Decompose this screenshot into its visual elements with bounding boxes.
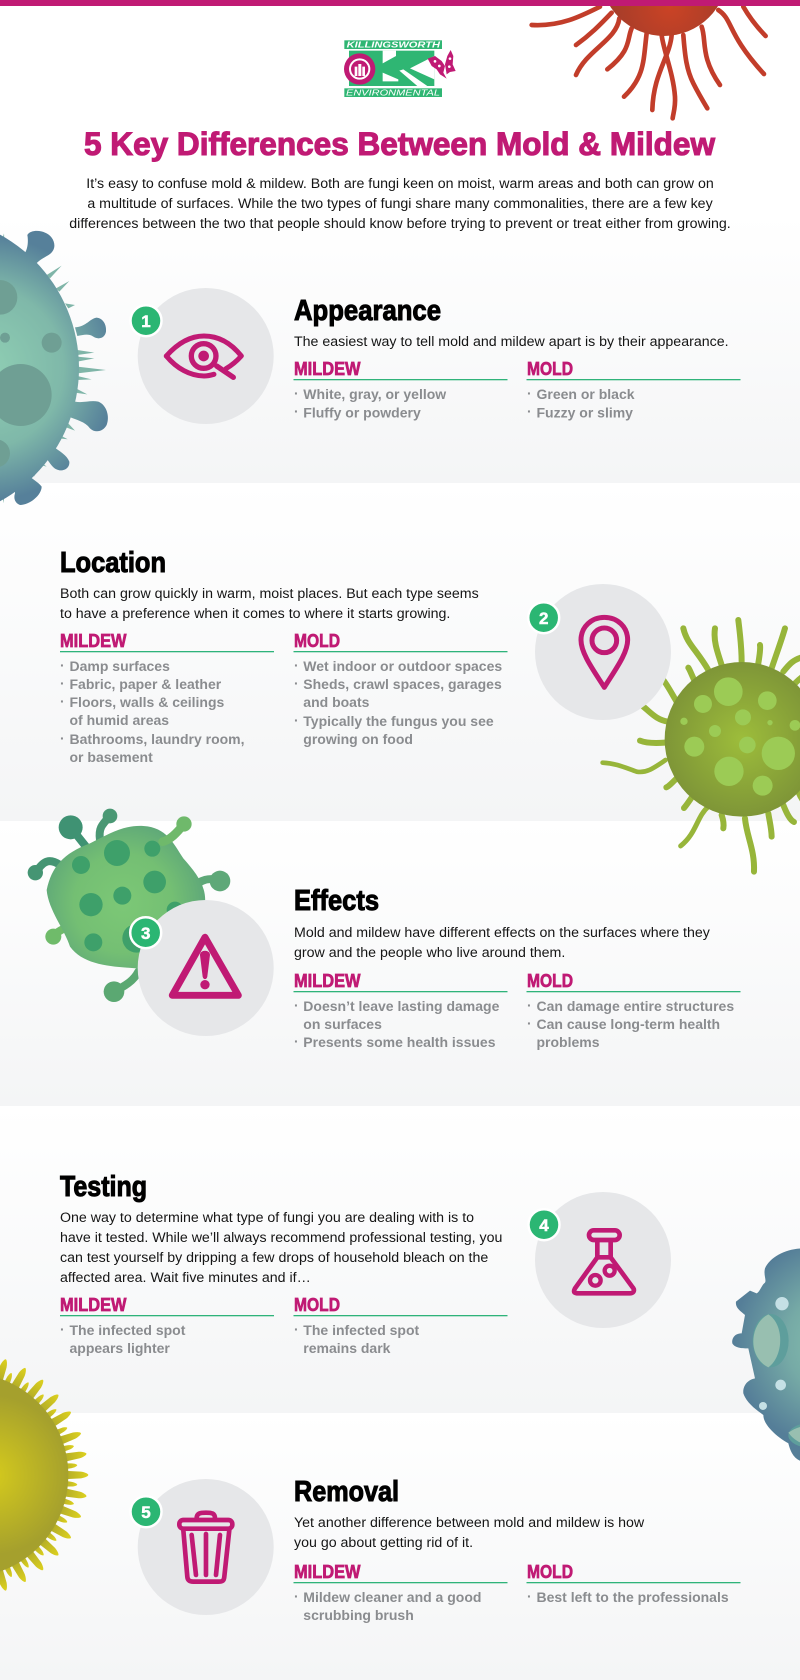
step 2: location circle with pin icon	[528, 584, 671, 720]
mold column: ·	[294, 675, 299, 691]
intro paragraph	[69, 176, 731, 232]
badge 5: 5	[141, 1503, 151, 1522]
mold column: growing on food	[303, 731, 413, 747]
mildew column	[60, 1294, 274, 1356]
mildew column: ·	[60, 730, 65, 746]
step 5 text: removal: you go about getting rid of it.	[294, 1535, 473, 1551]
mildew column: Fabric, paper & leather	[70, 676, 222, 692]
mildew column	[294, 358, 508, 420]
mildew column	[294, 970, 508, 1050]
mildew column: Floors, walls & ceilings	[70, 694, 225, 710]
logo: Killingsworth Environmental: ENVIRONMENTAL	[346, 88, 440, 98]
mildew column: The infected spot	[70, 1322, 186, 1338]
step 4 text: testing: One way to determine what type of fungi you are dealing with is to	[60, 1210, 474, 1226]
step 1: appearance circle with eye icon	[130, 288, 274, 424]
intro paragraph: It’s easy to confuse mold & mildew. Both are fungi keen on moist, warm areas and both can grow on	[86, 176, 714, 192]
badge 2: 2	[539, 609, 548, 628]
mildew column: or basement	[70, 749, 153, 765]
illustration: red mold spore, top right	[532, 0, 766, 118]
mold column: Sheds, crawl spaces, garages	[303, 676, 502, 692]
step 3 text: effects: Mold and mildew have different effects on the surfaces where they	[294, 925, 711, 941]
mildew column: MILDEW	[60, 630, 127, 651]
step 1 text: appearance	[294, 295, 740, 420]
title: 5 Key Differences Between Mold & Mildew	[84, 126, 715, 162]
mildew column: of humid areas	[70, 712, 169, 728]
badge 3	[130, 917, 161, 948]
badge 2	[528, 602, 559, 633]
mold column: remains dark	[303, 1340, 391, 1356]
mildew column: ·	[294, 385, 299, 401]
section band: appearance	[0, 215, 800, 483]
logo: Killingsworth Environmental: KILLINGSWORTH	[347, 40, 441, 50]
mildew column: ·	[294, 997, 299, 1013]
step 4 text: testing	[60, 1171, 508, 1356]
top bar	[0, 0, 800, 6]
mold column	[526, 970, 740, 1050]
badge 4	[528, 1209, 560, 1240]
mold column: problems	[536, 1034, 600, 1050]
mildew column: White, gray, or yellow	[303, 386, 446, 402]
mildew column: Presents some health issues	[303, 1034, 496, 1050]
mold column: Green or black	[536, 386, 635, 402]
mold column	[294, 1294, 508, 1356]
mold column: ·	[527, 1015, 532, 1031]
mildew column: MILDEW	[294, 970, 361, 991]
mold column: MOLD	[294, 1294, 340, 1315]
mold column: ·	[527, 403, 532, 419]
step 3: effects circle with warning icon	[130, 900, 274, 1036]
icon: eye with magnifier	[166, 336, 241, 377]
step 4 text: testing: have it tested. While we’ll always recommend professional testing, you	[60, 1230, 502, 1246]
illustration: blue-green spore, right	[732, 1248, 800, 1462]
mold column: ·	[527, 997, 532, 1013]
badge 1: 1	[141, 312, 151, 331]
mold column: Wet indoor or outdoor spaces	[303, 658, 502, 674]
step 3 text: effects	[294, 885, 740, 1050]
intro paragraph: differences between the two that people should know before trying to prevent or treat either from growing.	[69, 216, 731, 232]
step 4: testing circle with flask icon	[528, 1192, 671, 1328]
step 5 text: removal: Yet another difference between mold and mildew is how	[294, 1515, 645, 1531]
mildew column: scrubbing brush	[303, 1607, 414, 1623]
mold column	[526, 1561, 740, 1605]
mildew column: ·	[60, 693, 65, 709]
mildew column: ·	[294, 403, 299, 419]
mold column: Fuzzy or slimy	[536, 404, 633, 420]
section band: effects	[0, 821, 800, 1106]
mold column: Can damage entire structures	[536, 998, 734, 1014]
mildew column: MILDEW	[294, 1561, 361, 1582]
mold column: ·	[294, 657, 299, 673]
mildew column: ·	[60, 675, 65, 691]
illustration: olive green mold, right	[603, 620, 800, 872]
badge 5	[130, 1496, 162, 1527]
mold column: ·	[527, 385, 532, 401]
mold column: and boats	[303, 694, 370, 710]
step 1 text: appearance: The easiest way to tell mold and mildew apart is by their appearance.	[294, 334, 729, 350]
mildew column: ·	[294, 1033, 299, 1049]
mold column: MOLD	[527, 970, 573, 991]
mildew column: ·	[60, 1321, 65, 1337]
mold column: ·	[527, 1588, 532, 1604]
mildew column: Damp surfaces	[70, 658, 170, 674]
step 5 text: removal: Removal	[294, 1476, 399, 1508]
icon: flask	[574, 1230, 634, 1293]
mildew column: Mildew cleaner and a good	[303, 1589, 481, 1605]
step 3 text: effects: grow and the people who live around them.	[294, 945, 565, 961]
step 2 text: location: Both can grow quickly in warm, moist places. But each type seems	[60, 586, 479, 602]
mildew column: Bathrooms, laundry room,	[70, 731, 245, 747]
mold column: The infected spot	[303, 1322, 420, 1338]
mildew column: MILDEW	[294, 358, 361, 379]
mold column	[526, 358, 740, 420]
step 2 text: location	[60, 547, 508, 765]
mold column	[294, 630, 508, 747]
icon: trash can	[179, 1513, 232, 1582]
mold column: Typically the fungus you see	[303, 713, 494, 729]
mildew column: ·	[60, 657, 65, 673]
mildew column: on surfaces	[303, 1016, 382, 1032]
illustration: yellow mold, left	[0, 1358, 88, 1592]
logo: Killingsworth Environmental	[344, 40, 456, 98]
section band: location	[0, 483, 800, 821]
step 3 text: effects: Effects	[294, 885, 379, 917]
mildew column: MILDEW	[60, 1294, 127, 1315]
section band: testing	[0, 1106, 800, 1413]
illustration: teal virus, left	[0, 216, 108, 520]
mold column: ·	[294, 1321, 299, 1337]
icon: map pin	[581, 617, 628, 687]
step 4 text: testing: affected area. Wait five minutes and if…	[60, 1270, 311, 1286]
mildew column: Fluffy or powdery	[303, 404, 421, 420]
mold column: MOLD	[527, 358, 573, 379]
illustration: green bacterium, effects section	[28, 809, 230, 1002]
step 1 text: appearance: Appearance	[294, 295, 441, 327]
icon: warning triangle	[172, 937, 238, 995]
step 2 text: location: Location	[60, 547, 166, 579]
mold column: Can cause long-term health	[536, 1016, 720, 1032]
mildew column: appears lighter	[70, 1340, 170, 1356]
mold column: Best left to the professionals	[536, 1589, 729, 1605]
mold column: ·	[294, 712, 299, 728]
badge 1	[130, 305, 162, 336]
step 4 text: testing: can test yourself by dripping a few drops of household bleach on the	[60, 1250, 488, 1266]
mildew column: ·	[294, 1588, 299, 1604]
mold column: MOLD	[294, 630, 340, 651]
step 5 text: removal	[294, 1476, 740, 1623]
mildew column	[60, 630, 274, 765]
badge 3: 3	[141, 924, 150, 943]
step 2 text: location: to have a preference when it comes to where it starts growing.	[60, 606, 450, 622]
step 4 text: testing: Testing	[60, 1171, 147, 1203]
mold column: MOLD	[527, 1561, 573, 1582]
intro paragraph: a multitude of surfaces. While the two types of fungi share many commonalities, there are a few key	[87, 196, 714, 212]
step 5: removal circle with trash icon	[130, 1479, 274, 1615]
mildew column: Doesn’t leave lasting damage	[303, 998, 500, 1014]
badge 4: 4	[539, 1216, 549, 1235]
section band: removal	[0, 1413, 800, 1680]
mildew column	[294, 1561, 508, 1623]
